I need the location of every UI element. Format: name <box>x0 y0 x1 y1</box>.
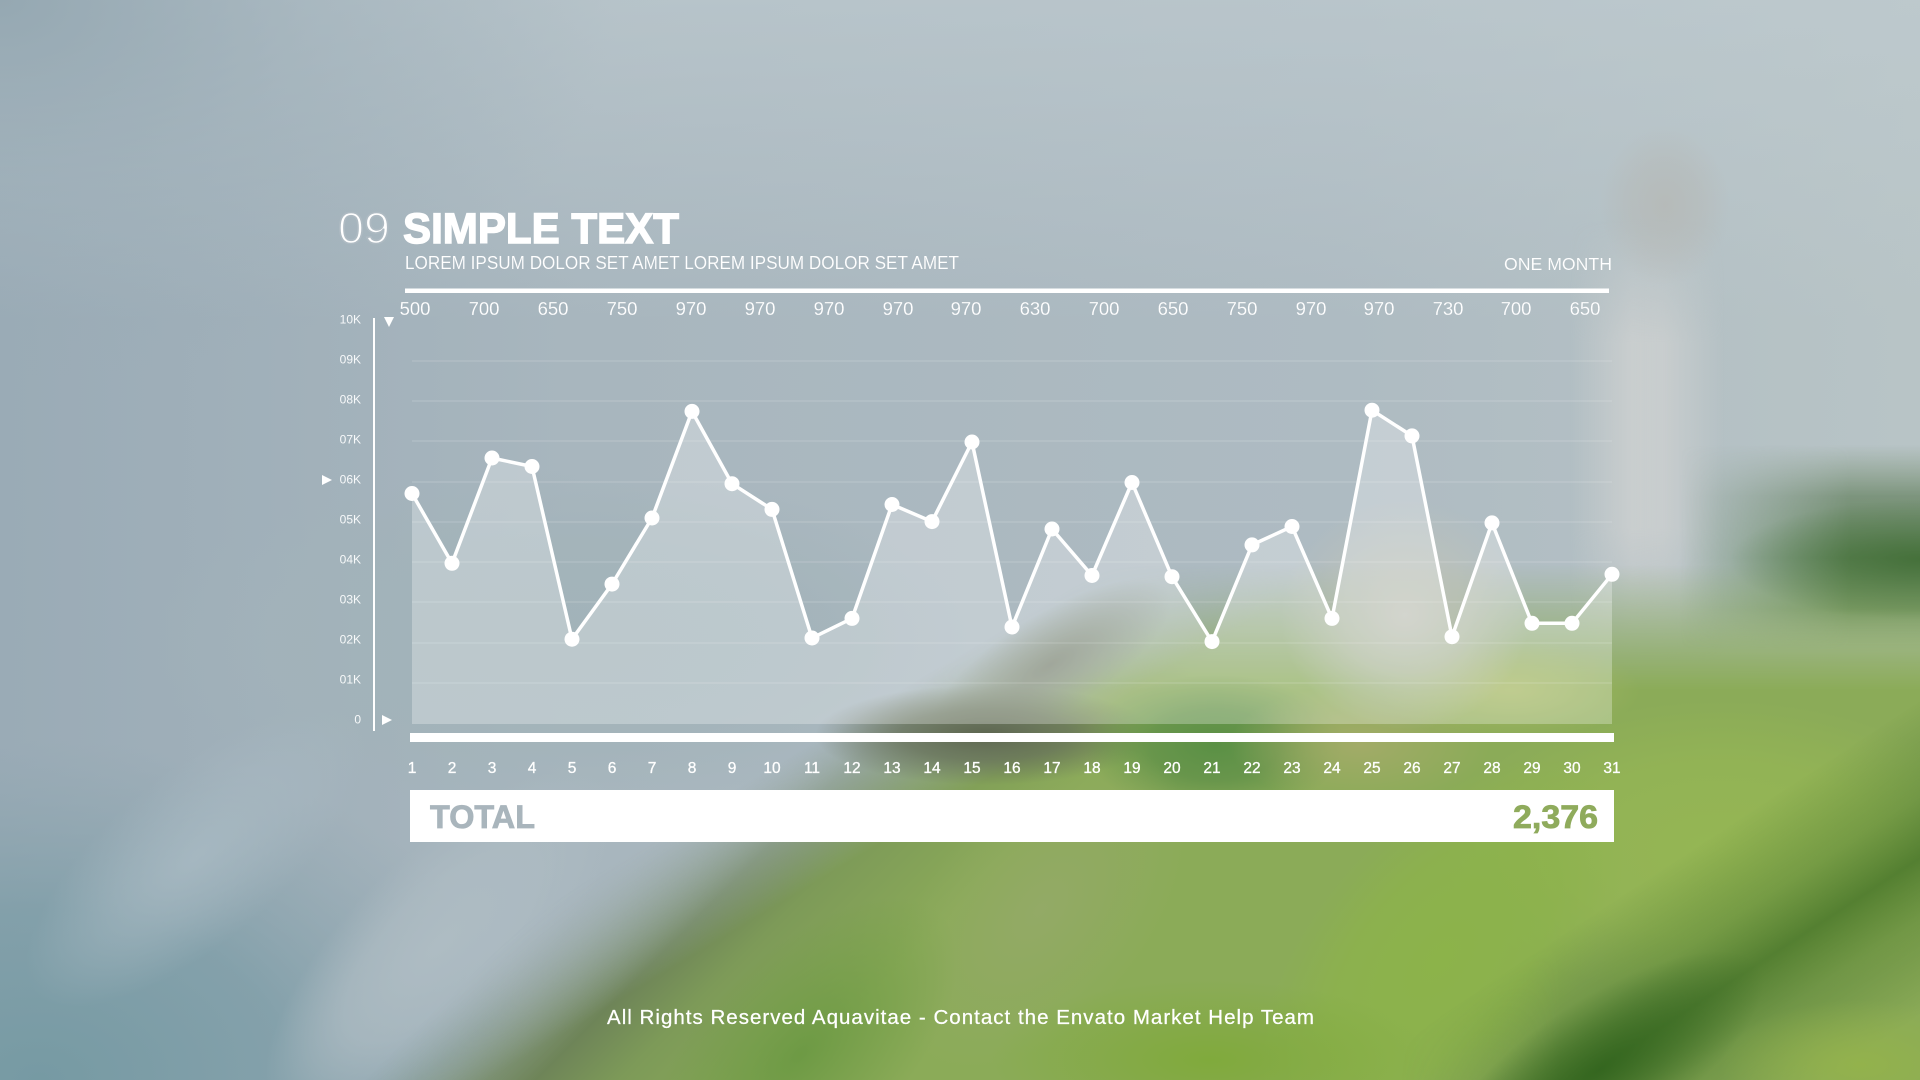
x axis day labels: 15 <box>963 760 981 777</box>
footer credit: All Rights Reserved Aquavitae - Contact the Envato Market Help Team <box>607 1006 1314 1029</box>
y axis labels <box>340 312 361 726</box>
y axis <box>322 312 394 731</box>
top value labels: 500 <box>400 298 430 319</box>
x axis day labels: 14 <box>923 760 941 777</box>
x axis day labels: 31 <box>1603 760 1621 777</box>
x axis day labels: 7 <box>648 760 656 777</box>
x axis day labels: 11 <box>804 760 820 777</box>
top value labels <box>400 298 1600 319</box>
x axis day labels: 26 <box>1403 760 1421 777</box>
total value: 2,376 <box>1513 799 1598 835</box>
x axis day labels: 17 <box>1043 760 1061 777</box>
total bar <box>410 790 1614 842</box>
x axis day labels: 8 <box>688 760 696 777</box>
x axis day labels: 23 <box>1283 760 1301 777</box>
x axis day labels: 4 <box>528 760 537 777</box>
x axis day labels: 10 <box>763 760 781 777</box>
y axis labels: 06K <box>340 472 361 486</box>
x axis day labels: 3 <box>488 760 496 777</box>
y axis labels: 10K <box>340 312 361 326</box>
top value labels: 970 <box>676 298 706 319</box>
x axis day labels: 24 <box>1323 760 1341 777</box>
arrow: origin marker <box>382 715 392 725</box>
y axis labels: 09K <box>340 352 361 366</box>
subtitle: LOREM IPSUM DOLOR SET AMET LOREM IPSUM DOLOR SET AMET <box>405 253 959 273</box>
period label: ONE MONTH <box>1504 254 1612 274</box>
y axis labels: 08K <box>340 392 361 406</box>
y axis labels: 01K <box>340 672 361 686</box>
top value labels: 970 <box>951 298 981 319</box>
arrow: level marker <box>322 475 332 485</box>
top value labels: 970 <box>745 298 775 319</box>
x axis day labels: 12 <box>843 760 861 777</box>
x axis day labels: 29 <box>1523 760 1541 777</box>
top value labels: 970 <box>1364 298 1394 319</box>
data points <box>404 403 1620 649</box>
x axis day labels: 22 <box>1243 760 1261 777</box>
x axis day labels: 25 <box>1363 760 1381 777</box>
x axis day labels: 27 <box>1443 760 1461 777</box>
y axis labels: 04K <box>340 552 361 566</box>
heading: SIMPLE TEXT <box>403 205 679 253</box>
y axis labels: 0 <box>354 712 361 726</box>
top value labels: 970 <box>1296 298 1326 319</box>
x axis day labels: 13 <box>883 760 901 777</box>
x axis day labels: 2 <box>448 760 456 777</box>
top value labels: 750 <box>607 298 637 319</box>
line chart <box>404 403 1620 724</box>
x axis day labels: 18 <box>1083 760 1101 777</box>
x axis day labels: 9 <box>728 760 736 777</box>
section number: 09 <box>338 204 390 253</box>
x axis day labels: 21 <box>1203 760 1221 777</box>
y axis labels: 02K <box>340 632 361 646</box>
y axis labels: 03K <box>340 592 361 606</box>
x axis bar <box>410 733 1614 742</box>
top value labels: 650 <box>538 298 568 319</box>
y axis labels: 07K <box>340 432 361 446</box>
top value labels: 750 <box>1227 298 1257 319</box>
top value labels: 730 <box>1433 298 1463 319</box>
top value labels: 700 <box>1089 298 1119 319</box>
x axis day labels: 16 <box>1003 760 1021 777</box>
total panel <box>410 790 1614 842</box>
data line <box>412 410 1612 642</box>
title <box>338 204 679 253</box>
axis line <box>373 318 375 731</box>
top value labels: 970 <box>883 298 913 319</box>
top value labels: 700 <box>469 298 499 319</box>
top rule <box>405 288 1609 293</box>
x axis day labels: 1 <box>408 760 416 777</box>
x axis day labels: 5 <box>568 760 576 777</box>
x axis day labels: 28 <box>1483 760 1501 777</box>
x axis day labels: 30 <box>1563 760 1581 777</box>
y axis labels: 05K <box>340 512 361 526</box>
x axis day labels: 20 <box>1163 760 1181 777</box>
arrow: top marker <box>384 317 394 327</box>
total label: TOTAL <box>430 799 535 835</box>
x axis day labels: 19 <box>1123 760 1141 777</box>
top value labels: 650 <box>1570 298 1600 319</box>
area fill <box>412 410 1612 724</box>
x axis day labels <box>408 760 1621 777</box>
top value labels: 650 <box>1158 298 1188 319</box>
top value labels: 700 <box>1501 298 1531 319</box>
top value labels: 630 <box>1020 298 1050 319</box>
grid lines <box>412 360 1612 684</box>
x axis day labels: 6 <box>608 760 616 777</box>
top value labels: 970 <box>814 298 844 319</box>
